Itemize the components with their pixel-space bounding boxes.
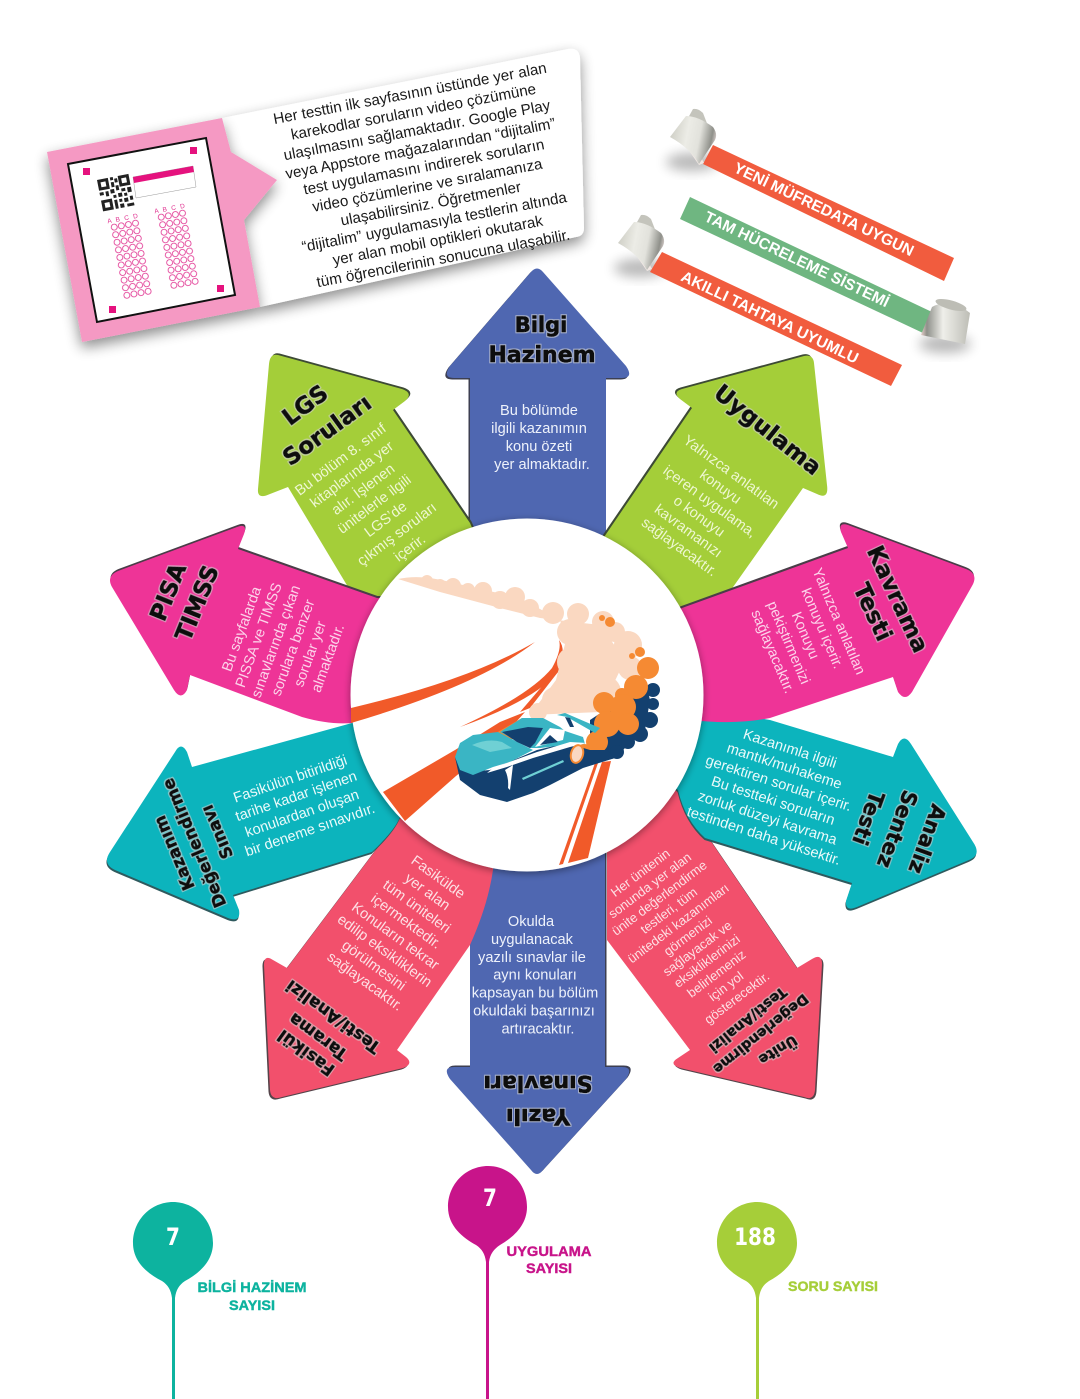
card text: video çözümlerine ve sıralamanıza <box>311 156 544 216</box>
ribbon: tam hücreleme sistemi <box>680 197 971 353</box>
stat: Soru sayısı <box>717 1202 878 1399</box>
answer bubbles: first column: A B C D <box>107 213 140 225</box>
arrow: Uygulama: sağlayacaktır. <box>638 515 720 580</box>
ribbon: yeni müfredata uygun <box>666 109 954 281</box>
arrow: Analiz Sentez Testi: Kazanımla ilgili <box>741 727 839 772</box>
arrow: Yazılı Sınavları: Okulda <box>508 914 555 930</box>
arrow: Fasikül Tarama Testi/Analizi: yer alan <box>401 871 453 914</box>
arrow: Ünite Değerlendirme Testi/Analizi: belirlemeniz <box>684 947 749 1001</box>
arrow: LGS Soruları: Bu bölüm 8. sınıf <box>292 420 390 499</box>
card text: ulaşılmasını sağlamaktadır. Google Play <box>282 97 552 164</box>
arrow: Kazanım Değerlendirme Sınavı <box>106 700 450 921</box>
arrow: LGS Soruları: ünitelerle ilgili <box>335 472 415 538</box>
stat: Uygulama sayısı: UYGULAMA <box>506 1243 592 1259</box>
arrow: Uygulama <box>538 354 827 648</box>
arrow: Ünite Değerlendirme Testi/Analizi: Ünite <box>755 1031 801 1069</box>
card text: karekodlar soruların video çözümüne <box>290 81 537 144</box>
arrow: Fasikül Tarama Testi/Analizi: içermektedir. <box>368 891 444 953</box>
road streaks <box>351 640 611 865</box>
car front wheel arch <box>505 765 513 790</box>
stat: Bilgi Hazinem sayısı: SAYISI <box>229 1297 275 1313</box>
arrow: Kazanım Değerlendirme Sınavı: Sınavı <box>198 802 237 862</box>
arrow: Bilgi Hazinem <box>445 268 629 702</box>
answer bubbles: second column: A B C D <box>154 203 187 215</box>
stat: Bilgi Hazinem sayısı <box>133 1202 306 1399</box>
arrow: Bilgi Hazinem: ilgili kazanımın <box>491 421 587 437</box>
arrow: Yazılı Sınavları: okuldaki başarınızı <box>473 1004 595 1020</box>
arrow: Kazanım Değerlendirme Sınavı: bir deneme sınavıdır. <box>243 801 377 860</box>
arrow: Analiz Sentez Testi: zorluk düzeyi kavrama <box>696 789 840 849</box>
arrow: LGS Soruları: içerir. <box>391 532 429 565</box>
arrow: Kavrama Testi <box>600 522 974 722</box>
arrow: Uygulama: o konuyu <box>670 493 727 541</box>
arrow: PISA TIMSS: TIMSS <box>171 562 225 645</box>
car roof <box>500 718 585 748</box>
smoke: navy base <box>590 683 660 765</box>
arrow: LGS Soruları: çıkmış soruları <box>355 500 440 570</box>
stat: Uygulama sayısı: 7 <box>483 1184 497 1213</box>
card text: ulaşabilirsiniz. Öğretmenler <box>339 178 522 229</box>
arrow: Fasikül Tarama Testi/Analizi <box>262 800 500 1100</box>
sheet header bar <box>133 166 196 198</box>
car rear wheel <box>569 744 585 764</box>
arrow: Bilgi Hazinem: Bu bölümde <box>500 403 578 419</box>
card panel: white text box <box>222 49 584 307</box>
card text: “dijitalim” uygulamasıyla testlerin altında <box>300 189 569 256</box>
card text: Her testtin ilk sayfasının üstünde yer alan <box>272 60 548 128</box>
arrow: Analiz Sentez Testi <box>640 700 977 911</box>
car spoiler <box>557 713 600 733</box>
arrow: Yazılı Sınavları: aynı konuları <box>493 968 577 984</box>
stat: Soru sayısı: 188 <box>734 1223 776 1252</box>
arrow: Ünite Değerlendirme Testi/Analizi: Değerlendirme <box>710 990 811 1076</box>
ribbons <box>614 109 971 386</box>
card text: veya Appstore mağazalarından “dijitalim” <box>284 115 557 183</box>
arrow: Kazanım Değerlendirme Sınavı: Değerlendirme <box>159 775 230 910</box>
arrow: Uygulama: içeren uygulama, <box>660 463 759 541</box>
arrow: Bilgi Hazinem: Bilgi <box>515 313 567 337</box>
stat: Uygulama sayısı <box>448 1166 592 1399</box>
arrow: Ünite Değerlendirme Testi/Analizi <box>587 790 824 1100</box>
arrow: Ünite Değerlendirme Testi/Analizi: sonunda yer alan <box>605 849 694 921</box>
stat: Uygulama sayısı: SAYISI <box>526 1260 572 1276</box>
arrow: Ünite Değerlendirme Testi/Analizi: Testi/Analizi <box>705 983 789 1055</box>
ribbon: akıllı tahtaya uyumlu: AKILLI TAHTAYA UYUMLU <box>678 268 861 367</box>
arrow: LGS Soruları: Soruları <box>278 390 377 472</box>
card text: yer alan mobil optikleri okutarak <box>331 213 545 269</box>
arrow: Ünite Değerlendirme Testi/Analizi: eksikliklerinizi <box>671 931 743 991</box>
arrow: LGS Soruları: LGS’de <box>362 499 410 541</box>
arrow: Yazılı Sınavları: Yazılı <box>506 1103 571 1128</box>
arrow: Kavrama Testi: Testi <box>847 579 897 645</box>
white disc <box>350 518 704 872</box>
arrow: Yazılı Sınavları: artıracaktır. <box>502 1021 574 1037</box>
car white sill <box>487 742 587 773</box>
arrow: LGS Soruları: LGS <box>278 380 333 431</box>
arrow: LGS Soruları: alır. İşlenen <box>328 459 398 519</box>
arrow: Analiz Sentez Testi: Sentez <box>872 787 922 871</box>
ribbon: tam hücreleme sistemi: TAM HÜCRELEME SİSTEMİ <box>702 207 892 311</box>
arrow: Fasikül Tarama Testi/Analizi: görülmesini <box>339 938 408 994</box>
icon: QR code <box>97 174 135 211</box>
arrow: Ünite Değerlendirme Testi/Analizi: sağlayacak ve <box>660 918 735 979</box>
card text: tüm öğrencilerinin sonucuna ulaşabilir. <box>315 227 571 291</box>
ribbon: akıllı tahtaya uyumlu <box>614 215 902 386</box>
arrow: Ünite Değerlendirme Testi/Analizi: görmenizi <box>661 913 715 959</box>
arrow: PISA TIMSS: PISSA ve TIMSS <box>233 581 286 690</box>
arrow: Ünite Değerlendirme Testi/Analizi: ünite değerlendirme <box>609 857 710 938</box>
arrow: Analiz Sentez Testi: testinden daha yüksektir. <box>685 804 842 869</box>
arrow: Ünite Değerlendirme Testi/Analizi: Her ünitenin <box>608 846 673 900</box>
arrow: Yazılı Sınavları: kapsayan bu bölüm <box>472 986 598 1002</box>
arrow: PISA TIMSS: almaktadır. <box>309 622 348 695</box>
card tab: pink answer sheet holder <box>47 118 277 342</box>
arrow: Uygulama: kavramanızı <box>651 502 725 561</box>
car orange wedge <box>496 718 540 740</box>
arrow: Uygulama: Uygulama <box>709 380 826 481</box>
arrow: Kavrama Testi: sağlayacaktır. <box>747 608 797 696</box>
arrow: Ünite Değerlendirme Testi/Analizi: ünitedeki kazanımları <box>625 880 732 966</box>
arrow: Kavrama Testi: Kavrama <box>861 542 933 657</box>
arrow: Bilgi Hazinem: yer almaktadır. <box>494 457 590 473</box>
arrow: Analiz Sentez Testi: gerektiren sorular içerir. <box>704 753 853 815</box>
arrow: PISA TIMSS: Bu sayfalarda <box>219 584 265 674</box>
arrow: Uygulama: Yalnızca anlatılan <box>680 433 782 513</box>
arrow: Uygulama: konuyu <box>696 467 744 508</box>
arrow: Kavrama Testi: pekiştirmenizi <box>763 599 813 687</box>
arrow: Yazılı Sınavları: yazılı sınavlar ile <box>478 950 586 966</box>
arrow: LGS Soruları: kitaplarında yer <box>308 438 397 511</box>
arrow: Analiz Sentez Testi: mantık/muhakeme <box>725 740 844 793</box>
stat: Bilgi Hazinem sayısı: BİLGİ HAZİNEM <box>198 1279 306 1295</box>
arrow: Bilgi Hazinem: Hazinem <box>488 343 596 368</box>
arrow: Fasikül Tarama Testi/Analizi: Fasikül <box>274 1026 338 1079</box>
arrow: LGS Soruları <box>258 353 522 640</box>
optical answer sheet <box>68 138 235 322</box>
arrow: Fasikül Tarama Testi/Analizi: Fasikülde <box>408 853 468 902</box>
car underbody <box>455 743 615 802</box>
stat: Soru sayısı: SORU SAYISI <box>788 1278 878 1294</box>
arrow: Fasikül Tarama Testi/Analizi: Tarama <box>285 1009 351 1064</box>
arrow: Yazılı Sınavları: uygulanacak <box>491 932 574 948</box>
arrow: Fasikül Tarama Testi/Analizi: Konuların tekrar <box>348 900 442 974</box>
arrow: Kavrama Testi: Konuyu <box>788 610 822 662</box>
arrow: Ünite Değerlendirme Testi/Analizi: gösterecektir. <box>701 969 772 1027</box>
arrow: Ünite Değerlendirme Testi/Analizi: testleri, tüm <box>637 884 700 937</box>
arrow: PISA TIMSS: PISA <box>146 560 192 625</box>
arrow: Fasikül Tarama Testi/Analizi: Testi/Analizi <box>282 976 384 1057</box>
arrow: Fasikül Tarama Testi/Analizi: sağlayacaktır. <box>324 949 405 1015</box>
arrow: PISA TIMSS: sınavlarında çıkan <box>249 583 304 700</box>
arrow: Kazanım Değerlendirme Sınavı: konulardan oluşan <box>243 787 361 841</box>
car hood <box>455 732 533 775</box>
car <box>455 713 615 802</box>
arrow: Kazanım Değerlendirme Sınavı: tarihe kadar işlenen <box>234 769 359 825</box>
arrow: Fasikül Tarama Testi/Analizi: tüm üniteleri <box>380 877 453 937</box>
arrow: Kavrama Testi: konuyu içerir. <box>797 586 846 671</box>
arrow: Kazanım Değerlendirme Sınavı: Kazanım <box>150 813 199 893</box>
arrow: PISA TIMSS: sorular yer <box>291 619 330 689</box>
smoke: orange cloud <box>576 615 659 760</box>
card text: test uygulamasını indirerek soruların <box>302 136 546 198</box>
arrow: Ünite Değerlendirme Testi/Analizi: için yol <box>705 968 746 1004</box>
arrow: Bilgi Hazinem: konu özeti <box>506 439 572 455</box>
arrow: Analiz Sentez Testi: Testi <box>847 788 889 848</box>
info card <box>47 49 584 342</box>
ribbon: yeni müfredata uygun: YENİ MÜFREDATA UYGUN <box>731 158 917 260</box>
arrow: Yazılı Sınavları <box>447 798 631 1174</box>
arrow: PISA TIMSS: sorulara benzer <box>269 597 318 698</box>
smoke: peach cloud <box>398 575 642 721</box>
arrow: Fasikül Tarama Testi/Analizi: edilip eksikliklerin <box>334 912 435 991</box>
car side window <box>535 728 565 747</box>
car windshield <box>502 727 543 748</box>
centre circle with drifting car <box>350 518 704 872</box>
arrow: Yazılı Sınavları: Sınavları <box>483 1070 593 1095</box>
arrow: Kavrama Testi: Yalnızca anlatılan <box>809 566 868 677</box>
arrow: Analiz Sentez Testi: Bu testteki soruların <box>709 774 837 829</box>
arrow: Analiz Sentez Testi: Analiz <box>903 801 951 877</box>
stat: Bilgi Hazinem sayısı: 7 <box>166 1223 180 1252</box>
arrow: Kazanım Değerlendirme Sınavı: Fasikülün bitirildiği <box>231 753 349 807</box>
arrow: PISA TIMSS <box>110 524 450 723</box>
